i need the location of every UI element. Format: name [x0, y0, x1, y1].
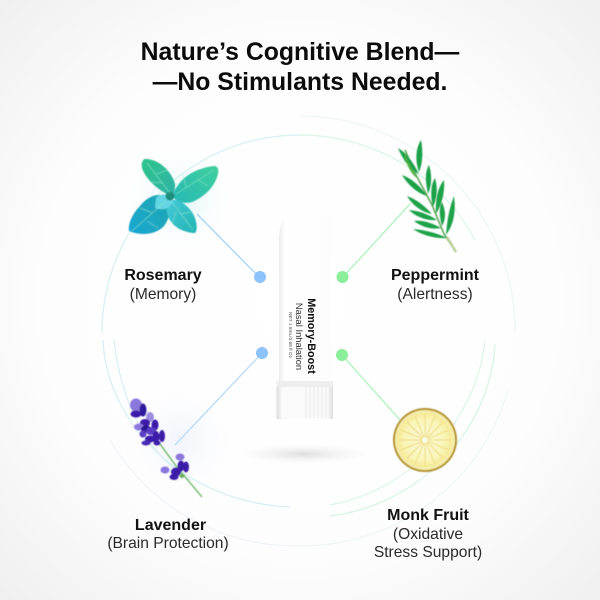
concentric rings — [102, 116, 515, 546]
label: monk fruit: Monk Fruit — [387, 507, 470, 524]
label: lavender: Lavender — [135, 517, 206, 534]
label: peppermint: Peppermint — [391, 267, 480, 284]
connector: monk fruit — [336, 349, 400, 420]
title: —No Stimulants Needed. — [153, 69, 447, 96]
label: peppermint: (Alertness) — [397, 286, 473, 303]
connector: peppermint — [336, 204, 410, 283]
label: rosemary: (Memory) — [130, 286, 196, 303]
product: tube shadow — [237, 444, 369, 464]
label: rosemary — [124, 267, 202, 303]
connector: rosemary — [197, 214, 266, 283]
label: rosemary: Rosemary — [124, 267, 202, 284]
product label: Memory-Boost — [305, 298, 317, 374]
icon: mint leaves — [129, 159, 218, 234]
title — [141, 39, 460, 96]
tube body — [279, 214, 330, 382]
icon: monk fruit slice — [393, 408, 457, 472]
cap — [276, 381, 333, 419]
product label — [287, 298, 317, 374]
label: monk fruit: (Oxidative — [393, 526, 463, 543]
label: monk fruit: Stress Support) — [374, 544, 482, 561]
connector: lavender — [175, 347, 268, 445]
product label: NET 1.8mL/0.68 fl Oz — [287, 312, 293, 359]
label: lavender: (Brain Protection) — [107, 535, 229, 552]
decorative glow behind plants — [120, 145, 240, 500]
icon: rosemary sprig — [398, 140, 456, 252]
product label: Nasal Inhalation — [294, 303, 305, 370]
title: Nature’s Cognitive Blend— — [141, 39, 460, 66]
icon: lavender sprig — [130, 398, 202, 497]
label: monk fruit — [374, 507, 482, 561]
label: lavender — [107, 517, 229, 552]
label: peppermint — [391, 267, 480, 303]
product: nasal inhaler — [276, 214, 333, 419]
